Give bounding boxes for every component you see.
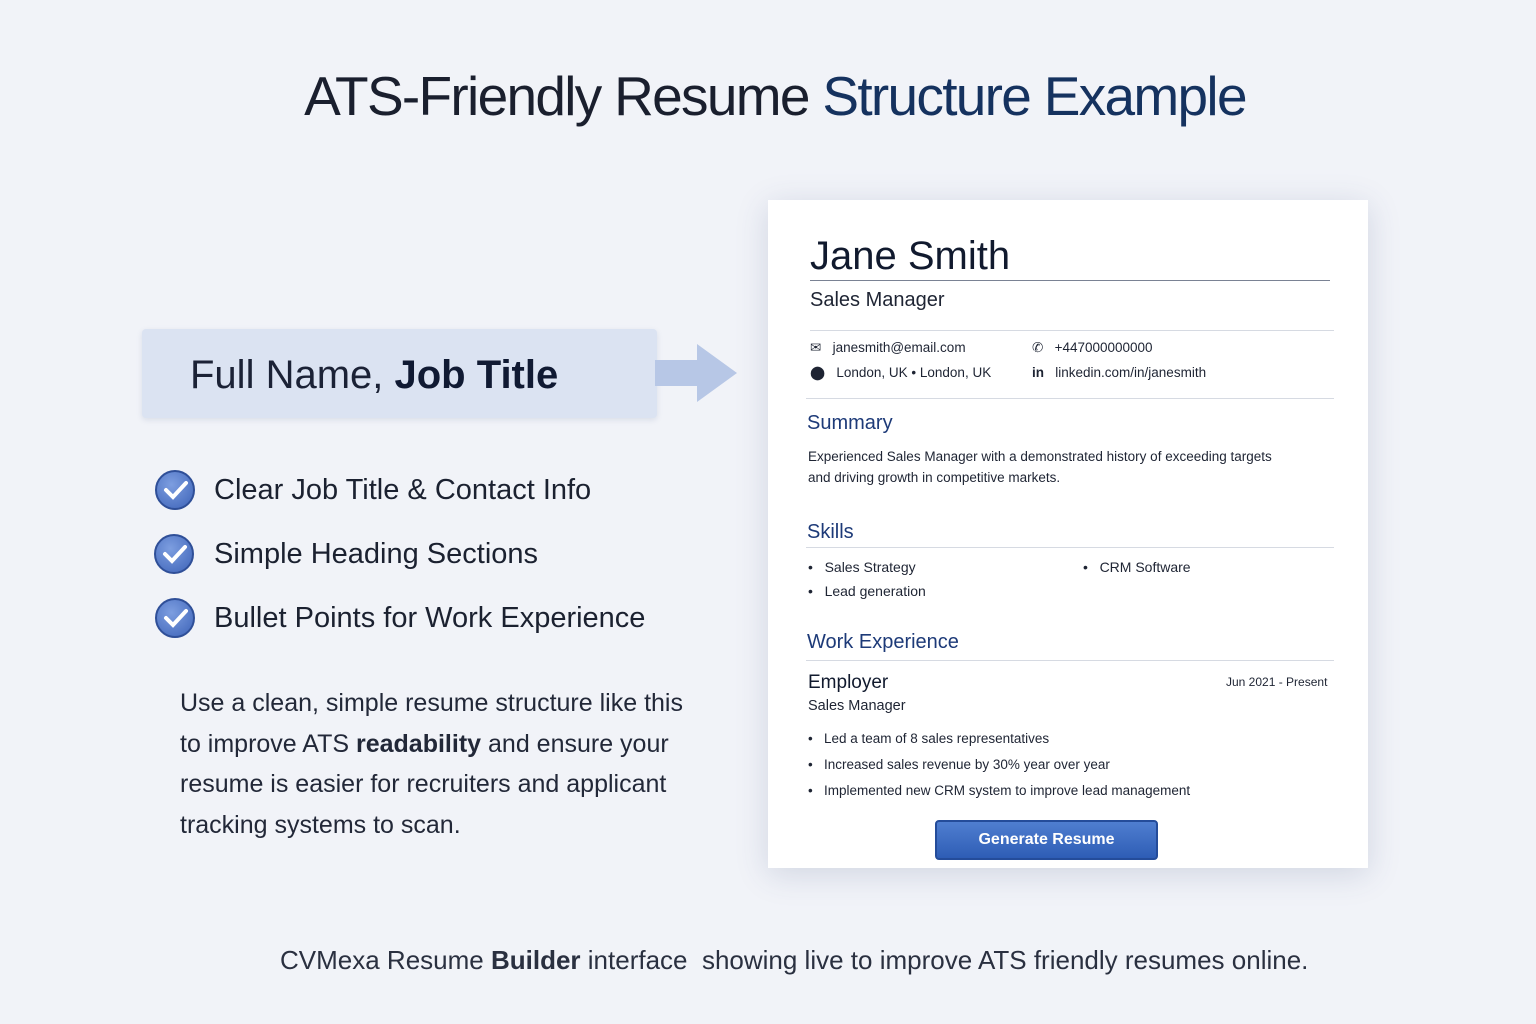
contact info	[810, 340, 1206, 380]
title: ATS-Friendly Resume Structure Example	[304, 65, 1246, 127]
skills list: • Lead generation	[808, 583, 926, 599]
callout box: full name job title: Full Name, Job Title	[190, 353, 558, 397]
callout box: full name job title	[142, 329, 657, 418]
experience bullets: • Increased sales revenue by 30% year over year	[808, 757, 1110, 772]
experience bullets: • Implemented new CRM system to improve lead management	[808, 783, 1190, 798]
resume card: Sales Manager	[808, 698, 906, 714]
work experience heading: Work Experience	[807, 631, 959, 653]
check item 1	[155, 470, 591, 510]
arrow	[655, 344, 737, 402]
skills list	[808, 559, 1191, 599]
skills heading: Skills	[807, 521, 854, 543]
resume card: Jun 2021 - Present	[1226, 675, 1327, 689]
resume card	[768, 200, 1368, 868]
job title: Sales Manager	[810, 289, 945, 311]
experience bullets	[808, 731, 1190, 798]
skills list: • CRM Software	[1083, 559, 1191, 575]
contact info: ✉ janesmith@email.com	[810, 340, 966, 355]
contact info: ✆ +447000000000	[1032, 340, 1153, 355]
contact info: in linkedin.com/in/janesmith	[1032, 365, 1206, 380]
experience bullets: • Led a team of 8 sales representatives	[808, 731, 1049, 746]
employer: Employer	[808, 672, 888, 693]
footer caption: CVMexa Resume Builder interface showing live to improve ATS friendly resumes online.	[280, 945, 1308, 975]
name: Jane Smith	[810, 234, 1010, 278]
generate button	[935, 820, 1158, 860]
check item 2: Simple Heading Sections	[214, 538, 538, 570]
skills list: • Sales Strategy	[808, 559, 916, 575]
check item 1: Clear Job Title & Contact Info	[214, 474, 591, 506]
check item 2	[154, 534, 538, 574]
check item 3: Bullet Points for Work Experience	[214, 602, 645, 634]
summary heading: Summary	[807, 412, 893, 434]
contact info: ⬤ London, UK • London, UK	[810, 365, 991, 380]
checklist	[154, 470, 645, 638]
summary text: Experienced Sales Manager with a demonstrated history of exceeding targets and driving growth in competitive markets.	[808, 449, 1272, 485]
generate button: Generate Resume	[978, 831, 1115, 848]
description text: Use a clean, simple resume structure like this to improve ATS readability and ensure your resume is easier for recruiters and applicant tracking systems to scan.	[180, 689, 683, 838]
